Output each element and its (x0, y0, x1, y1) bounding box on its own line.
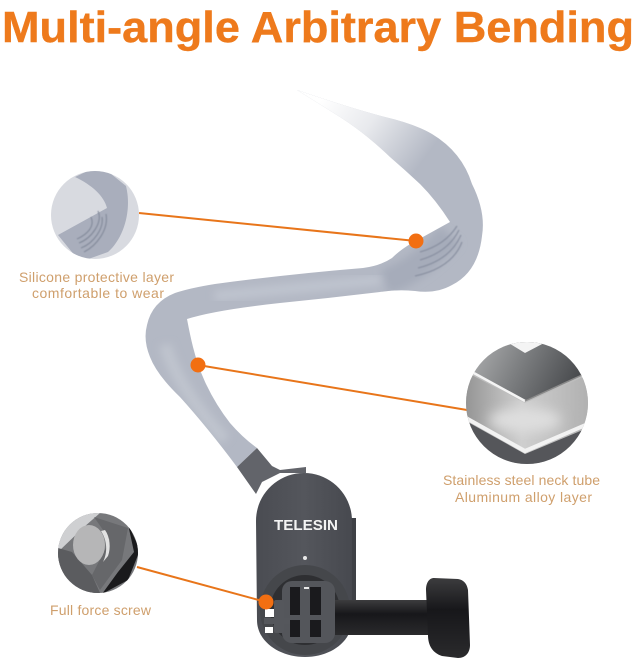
steel label: Stainless steel neck tube (443, 472, 600, 488)
callout dot: steel tube (190, 358, 206, 372)
callout line: steel tube (198, 365, 467, 410)
silicone ribs (415, 226, 462, 276)
indicator light (303, 556, 307, 560)
callout line: silicone layer (139, 213, 416, 241)
silicone label: Silicone protective layer (19, 269, 174, 285)
callout dot: screw (258, 594, 274, 610)
detail circle: steel layers (466, 340, 592, 470)
detail circle: screw (58, 513, 140, 594)
screw label: Full force screw (50, 602, 152, 618)
mount fingers (264, 581, 335, 643)
mount body (237, 448, 470, 658)
mount ring (260, 565, 350, 655)
silicone label line 2: comfortable to wear (32, 285, 164, 301)
neck collar (237, 448, 306, 494)
thumb screw knob (426, 578, 470, 658)
steel label line 2: Aluminum alloy layer (455, 489, 592, 505)
neck tube (146, 80, 483, 467)
brand logo: TELESIN (274, 518, 338, 534)
detail circle: silicone layer (51, 165, 139, 262)
callout line: screw (137, 567, 266, 602)
title: Multi-angle Arbitrary Bending (2, 3, 634, 52)
callout dot: silicone layer (408, 234, 424, 248)
thumb screw arm (335, 600, 429, 635)
